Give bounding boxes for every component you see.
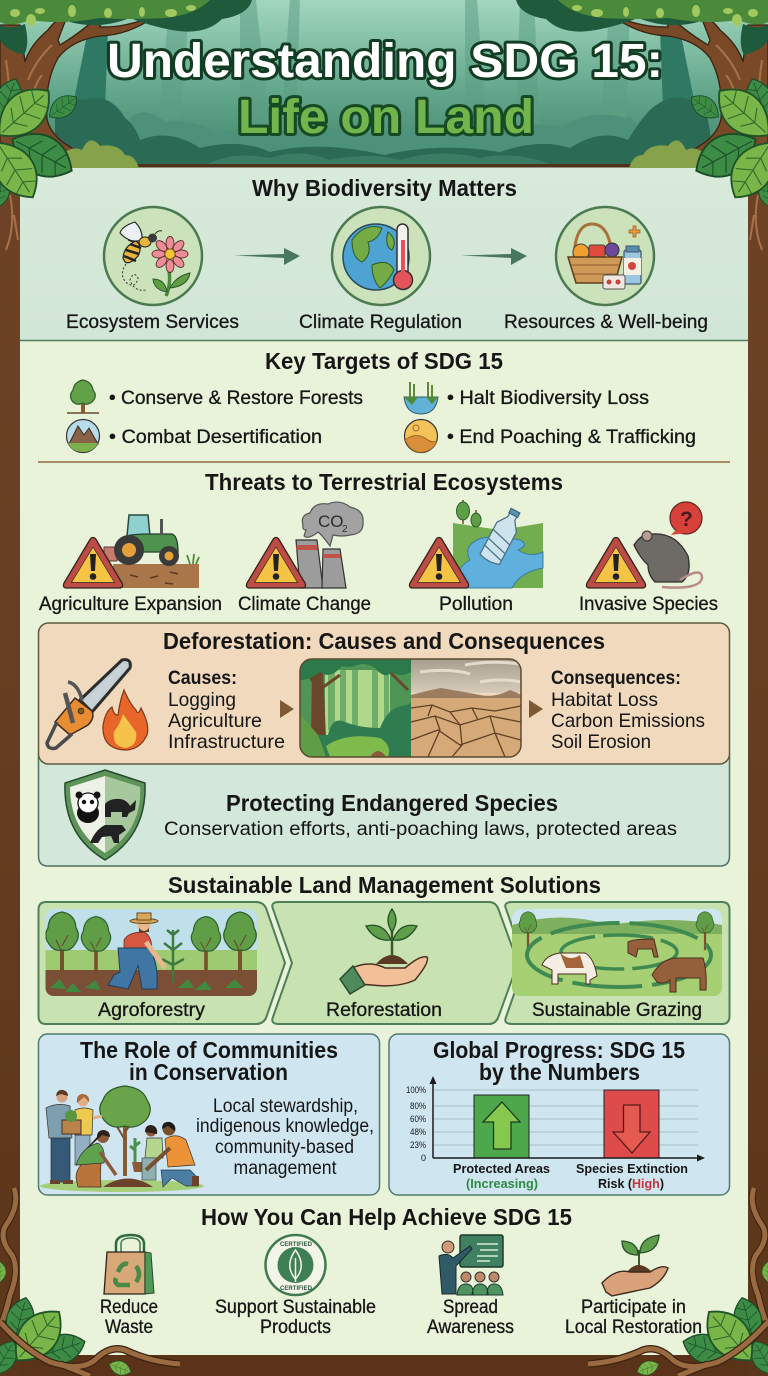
icon: globe and thermometer bbox=[332, 207, 430, 305]
label: climate change: Climate Change bbox=[238, 594, 371, 615]
heading: protecting endangered species: Protecting Endangered Species bbox=[226, 790, 558, 816]
heading line two: by the Numbers bbox=[479, 1059, 640, 1085]
target text: end poaching and trafficking: • End Poaching & Trafficking bbox=[447, 427, 696, 448]
image: rotational grazing bbox=[512, 909, 722, 996]
text: community description bbox=[196, 1096, 374, 1179]
label: agroforestry: Agroforestry bbox=[98, 1000, 206, 1021]
text: causes: Causes: bbox=[168, 668, 237, 689]
icon: certified badge: CERTIFIED bbox=[280, 1285, 312, 1292]
icon: wetland bbox=[404, 382, 438, 414]
icon: certified badge bbox=[266, 1235, 326, 1295]
icon: tree bbox=[67, 380, 99, 413]
icon: seedling in hand bbox=[340, 909, 428, 994]
bottom frame bbox=[20, 1355, 748, 1376]
heading line two: in Conservation bbox=[129, 1059, 288, 1085]
arrow bbox=[280, 700, 294, 718]
image: farmer planting among trees bbox=[45, 909, 257, 996]
title: Understanding SDG 15: bbox=[107, 35, 663, 88]
label: pollution: Pollution bbox=[439, 594, 513, 615]
text: causes: Infrastructure bbox=[168, 731, 285, 753]
chart label: species extinction risk bbox=[576, 1161, 688, 1191]
label: support sustainable products: Products bbox=[260, 1317, 331, 1338]
text: consequences: Soil Erosion bbox=[551, 731, 651, 753]
target text: conserve and restore forests: • Conserve & Restore Forests bbox=[109, 388, 363, 409]
heading: how you can help: How You Can Help Achieve SDG 15 bbox=[201, 1204, 572, 1230]
chart label: protected areas bbox=[453, 1161, 550, 1191]
icon: chainsaw and fire bbox=[47, 660, 148, 750]
label: resources and well-being: Resources & Well-being bbox=[504, 312, 708, 333]
bar chart: 0 bbox=[421, 1153, 426, 1163]
arrow bbox=[529, 700, 543, 718]
title bbox=[107, 35, 663, 144]
text: causes: Logging bbox=[168, 689, 236, 711]
heading: role of communities: The Role of Communities bbox=[80, 1037, 338, 1063]
bar chart bbox=[406, 1076, 705, 1163]
panel: role of communities bbox=[38, 1034, 380, 1195]
target text: halt biodiversity loss: • Halt Biodiversity Loss bbox=[447, 388, 649, 409]
icon: basket and medicine bbox=[556, 207, 654, 305]
text: community description: Local stewardship, bbox=[213, 1096, 358, 1117]
label: reduce waste: Waste bbox=[105, 1317, 153, 1338]
image frame bbox=[300, 659, 521, 757]
chart label: protected areas: (Increasing) bbox=[466, 1176, 538, 1191]
panel: why biodiversity matters bbox=[20, 167, 748, 340]
icon: smokestacks and co2: 2 bbox=[342, 524, 348, 535]
bar chart: 80% bbox=[410, 1101, 426, 1111]
icon: invasive rat: ? bbox=[680, 508, 693, 531]
label: sustainable grazing: Sustainable Grazing bbox=[532, 1000, 702, 1021]
icon: shield with animals bbox=[65, 770, 145, 860]
chart label: species extinction risk: Risk (High) bbox=[598, 1176, 664, 1191]
text: community description: management bbox=[234, 1158, 337, 1179]
label: reduce waste: Reduce bbox=[100, 1297, 158, 1318]
text: conservation efforts: Conservation efforts, anti-poaching laws, protected areas bbox=[164, 819, 677, 840]
icon: tractor threat bbox=[63, 515, 199, 588]
section: sustainable land management bbox=[38, 872, 730, 1024]
bar chart: 100% bbox=[406, 1085, 426, 1095]
text: consequences: Carbon Emissions bbox=[551, 710, 705, 732]
tree: top left bbox=[0, 0, 252, 250]
label: reduce waste bbox=[100, 1297, 158, 1338]
icon: invasive rat bbox=[586, 502, 702, 588]
text: causes: Agriculture bbox=[168, 710, 262, 732]
label: support sustainable products bbox=[215, 1297, 376, 1338]
label: participate in local restoration: Local Restoration bbox=[565, 1317, 702, 1338]
label: spread awareness: Awareness bbox=[427, 1317, 514, 1338]
panel: protecting endangered species bbox=[38, 755, 730, 866]
chart label: species extinction risk: Species Extinction bbox=[576, 1161, 688, 1176]
label: participate in local restoration bbox=[565, 1297, 702, 1338]
heading: deforestation: Deforestation: Causes and Consequences bbox=[163, 628, 605, 654]
text: consequences: Habitat Loss bbox=[551, 689, 658, 711]
label: ecosystem services: Ecosystem Services bbox=[66, 312, 239, 333]
section: key targets bbox=[66, 348, 696, 452]
text: causes bbox=[168, 668, 285, 753]
header shelf edge bbox=[0, 164, 768, 168]
icon: certified badge: CERTIFIED bbox=[280, 1241, 312, 1248]
label: climate regulation: Climate Regulation bbox=[299, 312, 462, 333]
icon: smokestacks and co2: CO bbox=[318, 512, 344, 531]
panel: global progress bbox=[389, 1034, 730, 1195]
image: forest vs cracked earth bbox=[300, 659, 521, 757]
tree: top right bbox=[516, 0, 768, 250]
section: how you can help bbox=[100, 1204, 702, 1338]
icon: smokestacks and co2 bbox=[246, 502, 363, 588]
leaves and vines: bottom right bbox=[588, 1188, 768, 1376]
label: spread awareness: Spread bbox=[443, 1297, 498, 1318]
heading: key targets: Key Targets of SDG 15 bbox=[265, 348, 503, 374]
label: participate in local restoration: Participate in bbox=[581, 1297, 686, 1318]
text: community description: indigenous knowledge, bbox=[196, 1116, 374, 1137]
arrow bbox=[461, 248, 527, 265]
panel: sustainable grazing bbox=[505, 902, 730, 1024]
icon: recycling bag bbox=[104, 1235, 154, 1294]
label: invasive species: Invasive Species bbox=[579, 594, 718, 615]
bar chart: 23% bbox=[410, 1140, 426, 1150]
icon: desert bbox=[404, 420, 438, 452]
section: threats bbox=[39, 469, 718, 615]
illustration: community planting bbox=[40, 1086, 204, 1192]
panel: deforestation bbox=[38, 623, 730, 764]
text: community description: community-based bbox=[215, 1137, 354, 1158]
label: reforestation: Reforestation bbox=[326, 1000, 442, 1021]
label: agriculture expansion: Agriculture Expansion bbox=[39, 594, 222, 615]
icon: teacher presenting bbox=[439, 1235, 503, 1295]
bar chart: 60% bbox=[410, 1114, 426, 1124]
heading: why biodiversity matters: Why Biodiversity Matters bbox=[252, 175, 517, 201]
text: consequences bbox=[551, 668, 705, 753]
arrow bbox=[234, 248, 300, 265]
bar chart: 48% bbox=[410, 1127, 426, 1137]
target text: combat desertification: • Combat Desertification bbox=[109, 427, 322, 448]
header forest scene bbox=[0, 0, 768, 168]
panel: reforestation bbox=[272, 902, 518, 1024]
title: Life on Land bbox=[238, 91, 534, 144]
heading: sustainable land management: Sustainable Land Management Solutions bbox=[168, 872, 601, 898]
heading: threats: Threats to Terrestrial Ecosystems bbox=[205, 469, 563, 495]
panel: agroforestry bbox=[38, 902, 285, 1024]
heading: global progress: Global Progress: SDG 15 bbox=[433, 1037, 685, 1063]
chart label: protected areas: Protected Areas bbox=[453, 1161, 550, 1176]
icon: mountains bbox=[66, 420, 100, 452]
leaves and vines: bottom left bbox=[0, 1188, 180, 1376]
text: consequences: Consequences: bbox=[551, 668, 681, 689]
icon: hand with seedling bbox=[602, 1235, 668, 1296]
label: support sustainable products: Support Sustainable bbox=[215, 1297, 376, 1318]
icon: plastic pollution bbox=[409, 500, 543, 588]
icon: bee and flower bbox=[104, 207, 202, 305]
label: spread awareness bbox=[427, 1297, 514, 1338]
